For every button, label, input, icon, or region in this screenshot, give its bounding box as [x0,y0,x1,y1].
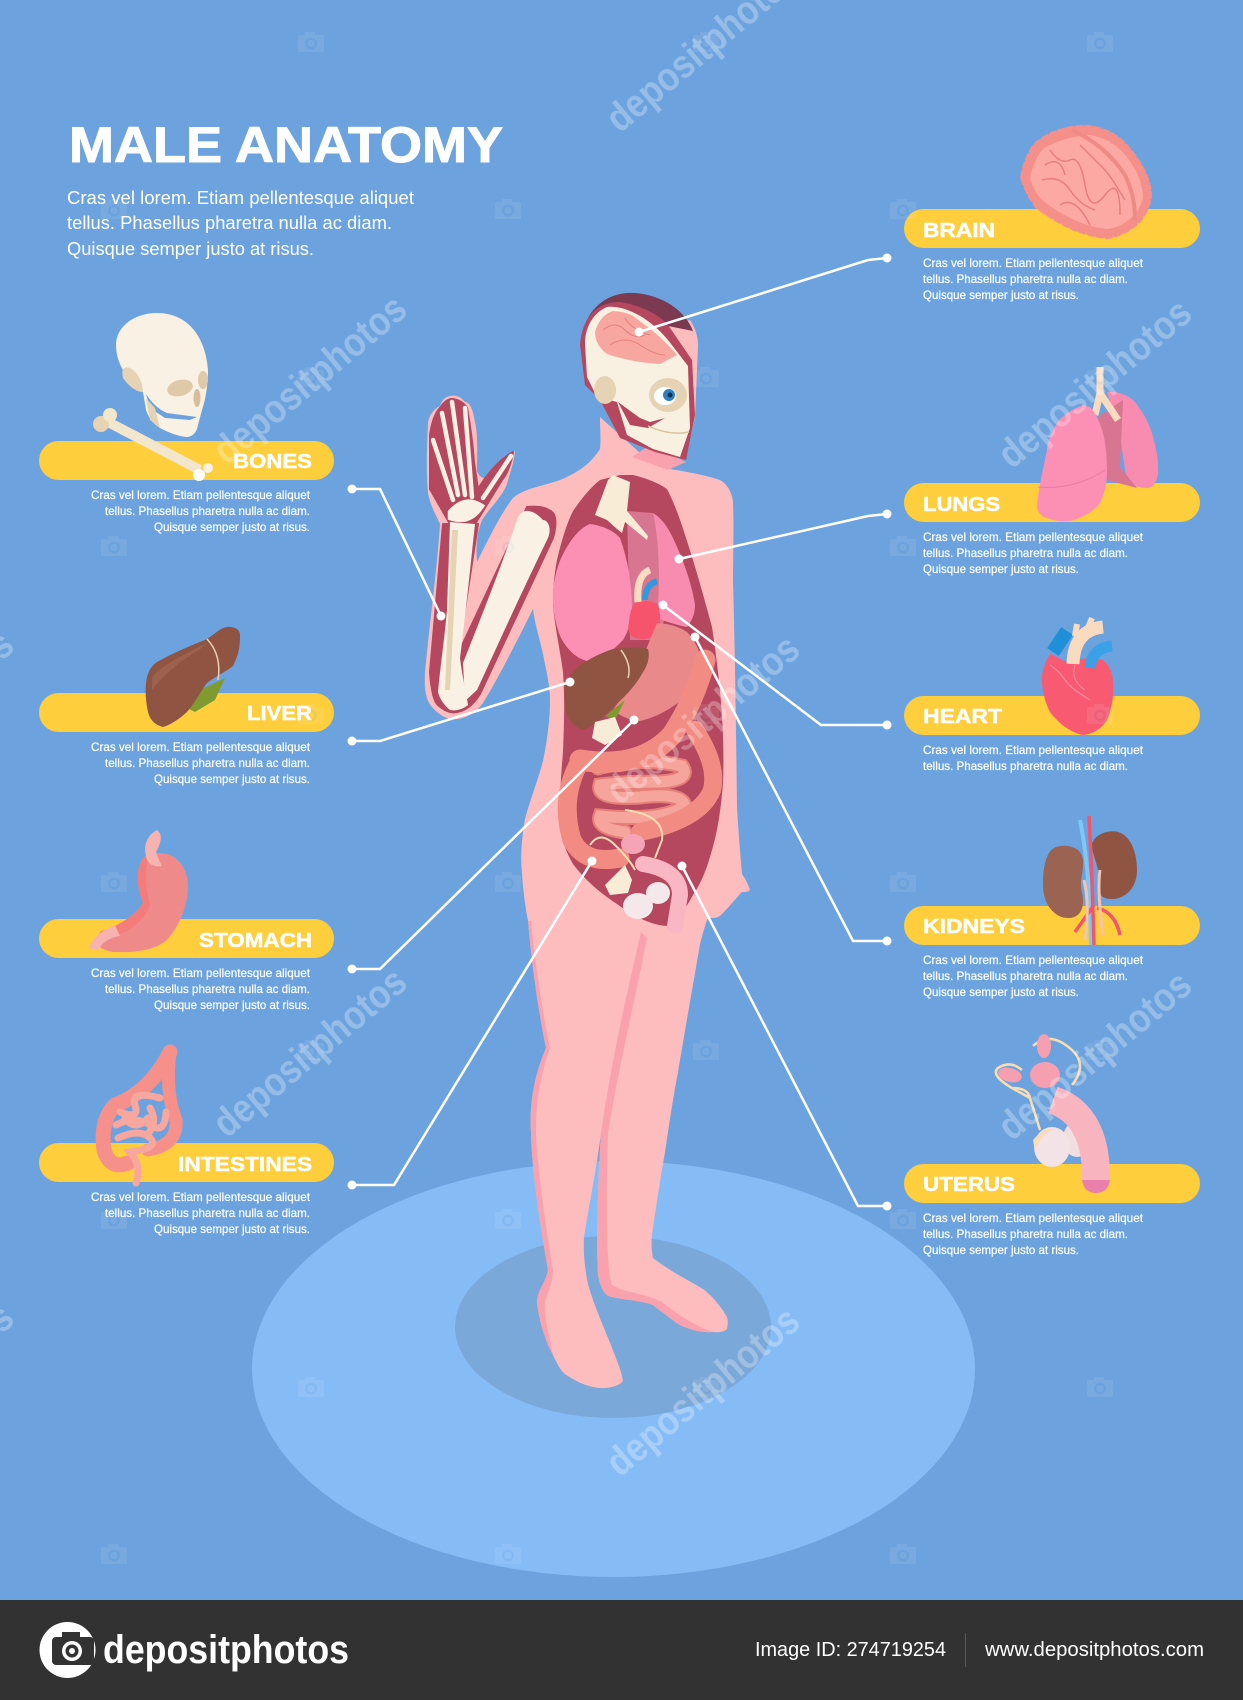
panel: lungs [904,367,1200,576]
description: tellus. Phasellus pharetra nulla ac diam. [923,272,1128,286]
icon: heart [1042,618,1113,735]
watermark text: depositphotos [598,626,808,813]
figure: arm cut-away [430,507,556,712]
icon: kidneys [1043,816,1137,945]
description: Cras vel lorem. Etiam pellentesque aliquet [91,966,311,980]
head: eye [654,387,676,405]
label: LUNGS [923,493,1000,516]
organ: bladder [621,834,645,854]
figure: body cavity [553,475,723,926]
figure: arm bones [438,511,550,710]
footer divider [965,1633,966,1667]
floor platform [252,1161,975,1577]
description [923,953,1144,999]
figure: skin shading [528,445,713,1355]
footer bar [0,1600,1243,1700]
watermark text: depositphotos [990,290,1200,477]
panel: intestines [39,1052,334,1236]
description: Cras vel lorem. Etiam pellentesque aliquet [91,1190,311,1204]
description: Quisque semper justo at risus. [923,1243,1079,1257]
icon: skull [116,313,208,437]
description [923,256,1144,302]
description: Cras vel lorem. Etiam pellentesque aliquet [923,256,1144,270]
head: brain [595,311,677,364]
label: KIDNEYS [923,915,1025,938]
description [91,966,311,1012]
pill [904,696,1200,735]
description: Quisque semper justo at risus. [154,772,310,786]
footer image id: Image ID: 274719254 [755,1639,946,1661]
description: tellus. Phasellus pharetra nulla ac diam. [105,504,310,518]
organ: stomach [613,623,700,721]
icon: stomach [89,830,188,952]
description: Quisque semper justo at risus. [923,562,1079,576]
intro text [67,187,414,259]
organ: spine and trachea [595,475,648,540]
panel: heart [904,618,1200,773]
pill [904,209,1200,248]
floor shadow [455,1236,771,1418]
label: BONES [233,450,312,473]
panel: uterus [904,1034,1200,1257]
panel: kidneys [904,816,1200,999]
figure: body silhouette [425,396,750,1388]
figure: hand bones [433,402,511,520]
label: LIVER [247,702,312,725]
figure: hand cut-away [430,399,513,524]
watermark text: depositphotos [205,286,415,473]
organ: large intestine [567,660,713,860]
pill [904,483,1200,522]
label: STOMACH [199,929,312,952]
watermark text: depositphotos [598,1298,808,1485]
title: MALE ANATOMY [69,117,503,173]
pill [39,1143,334,1182]
description: Quisque semper justo at risus. [154,1222,310,1236]
intro text: Cras vel lorem. Etiam pellentesque aliquet [67,187,414,208]
organ: liver [565,647,649,730]
panel: bones [39,313,334,534]
organ: left lung [553,524,632,661]
watermark text: depositphotos [205,959,415,1146]
footer logo text: depositphotos [103,1628,349,1672]
pill [904,906,1200,945]
footer logo icon [40,1622,96,1678]
head: temple hollow [594,376,616,404]
description [91,1190,311,1236]
description: Quisque semper justo at risus. [154,998,310,1012]
description: Cras vel lorem. Etiam pellentesque aliquet [923,1211,1144,1225]
description: Quisque semper justo at risus. [154,520,310,534]
description: tellus. Phasellus pharetra nulla ac diam. [923,546,1128,560]
description: Cras vel lorem. Etiam pellentesque aliquet [923,953,1144,967]
icon: lungs [1037,367,1158,521]
description: tellus. Phasellus pharetra nulla ac diam. [923,759,1128,773]
organ: testes [623,882,670,919]
description: tellus. Phasellus pharetra nulla ac diam. [105,756,310,770]
description: Cras vel lorem. Etiam pellentesque aliquet [923,530,1144,544]
organ: right lung [653,513,695,627]
description [923,1211,1144,1257]
head: cut edge [580,302,695,460]
label: INTESTINES [178,1153,312,1176]
description [91,488,311,534]
organ: mediastinum [627,511,670,640]
description: Quisque semper justo at risus. [923,288,1079,302]
description: tellus. Phasellus pharetra nulla ac diam. [105,1206,310,1220]
head: hair [582,293,693,340]
intro text: tellus. Phasellus pharetra nulla ac diam. [67,212,392,233]
organ: external genital [643,864,680,926]
head: skin side [655,320,698,458]
description: Cras vel lorem. Etiam pellentesque aliquet [91,488,311,502]
watermark text: depositphotos [990,962,1200,1149]
panel: stomach [39,830,334,1012]
icon: bone [93,408,213,481]
label: BRAIN [923,219,995,242]
connector lines [348,254,892,1210]
description [91,740,311,786]
organ: heart [628,570,660,639]
pill [904,1164,1200,1203]
description [923,530,1144,576]
intro text: Quisque semper justo at risus. [67,238,314,259]
description: tellus. Phasellus pharetra nulla ac diam. [923,969,1128,983]
icon: liver [146,627,240,727]
icon: intestines [103,1052,176,1183]
pill [39,693,334,732]
description: Quisque semper justo at risus. [923,985,1079,999]
panel: brain [904,127,1200,302]
organ: small intestine [598,761,685,832]
head: skull [585,307,690,457]
footer url: www.depositphotos.com [984,1639,1204,1661]
description: tellus. Phasellus pharetra nulla ac diam. [105,982,310,996]
organ: pelvic bones [605,865,632,895]
head: jaw gap [618,402,665,428]
watermark cameras [101,32,1113,1564]
label: HEART [923,705,1003,728]
organ: ducts [590,810,662,870]
description: Cras vel lorem. Etiam pellentesque aliquet [91,740,311,754]
head: teeth line [648,426,689,433]
anatomical figure [425,293,750,1388]
icon: reproductive organs [996,1034,1110,1193]
pill [39,919,334,958]
figure: head [580,293,698,460]
description [923,743,1144,773]
label: UTERUS [923,1173,1015,1196]
panel: liver [39,627,334,786]
description: Cras vel lorem. Etiam pellentesque aliquet [923,743,1144,757]
head: eye socket [649,378,687,412]
icon: brain [1022,127,1150,237]
organ: lower spine [592,717,622,745]
description: tellus. Phasellus pharetra nulla ac diam. [923,1227,1128,1241]
pill [39,441,334,480]
